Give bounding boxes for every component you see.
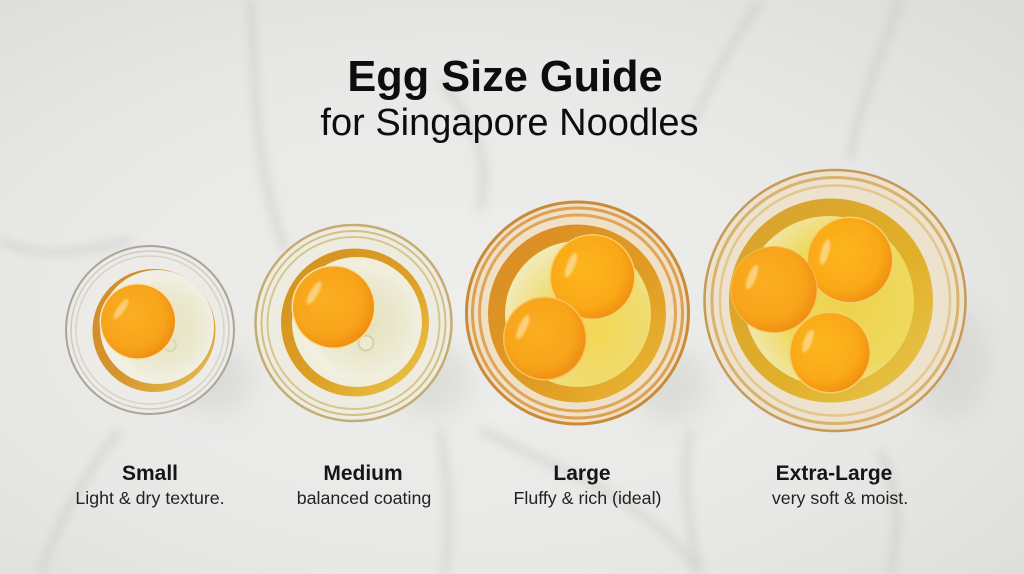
label: large: Fluffy & rich (ideal) xyxy=(514,488,661,508)
bowl: small xyxy=(66,246,234,414)
label: medium: balanced coating xyxy=(297,488,431,508)
label: large xyxy=(514,462,661,508)
bowl: large xyxy=(466,202,688,424)
label: large: Large xyxy=(553,462,611,485)
title: Egg Size Guide xyxy=(347,53,663,101)
bowl shadows xyxy=(177,300,990,421)
label: extra-large: Extra-Large xyxy=(776,462,892,485)
bowl: medium xyxy=(256,225,452,421)
label: medium: Medium xyxy=(323,462,403,485)
label: small: Light & dry texture. xyxy=(75,488,225,508)
label: small: Small xyxy=(122,462,178,485)
bowl: extra-large xyxy=(704,170,966,431)
title: for Singapore Noodles xyxy=(320,102,699,144)
label: small xyxy=(75,462,225,508)
label: extra-large xyxy=(772,462,908,508)
title xyxy=(320,53,699,144)
label: extra-large: very soft & moist. xyxy=(772,488,908,508)
label: medium xyxy=(297,462,431,508)
